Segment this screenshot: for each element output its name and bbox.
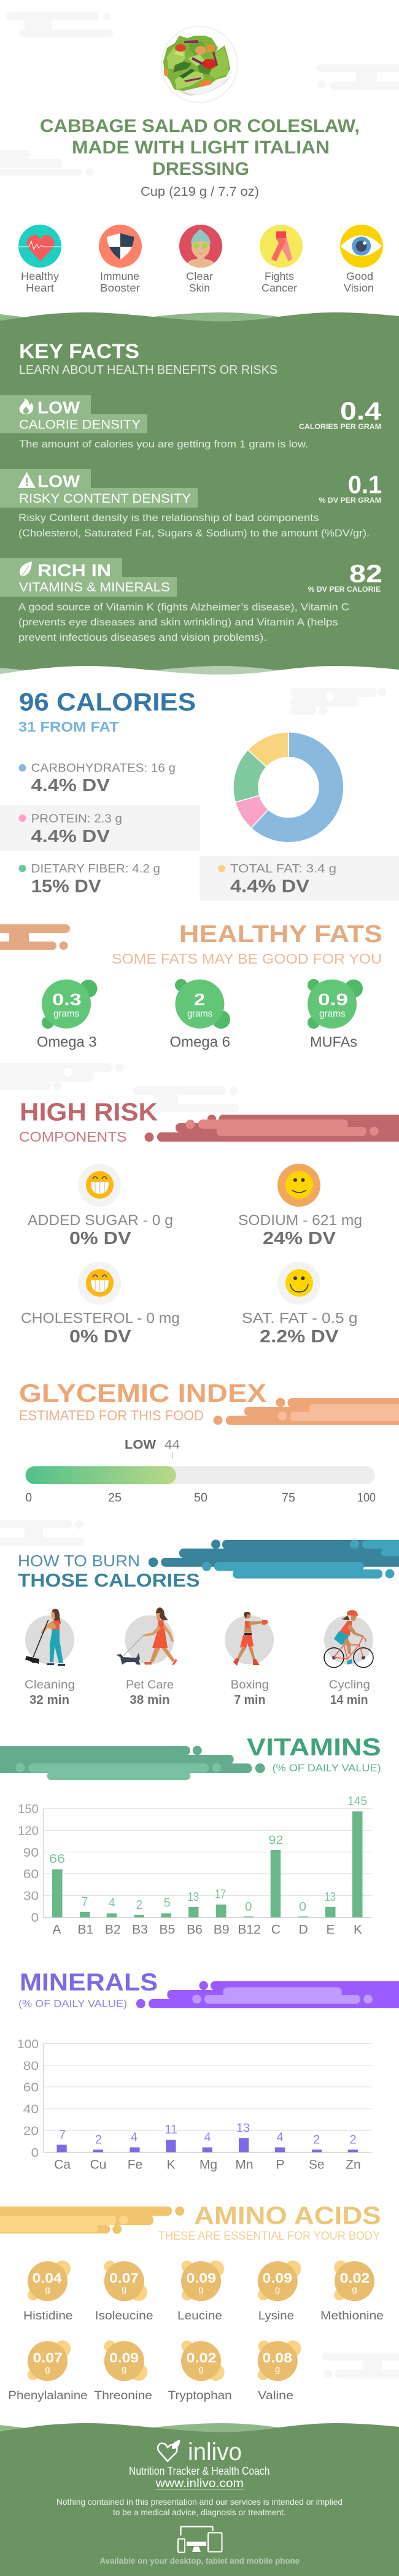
bar chart: minerals: Mn (235, 2157, 254, 2172)
tagline: Nutrition Tracker & Health Coach (129, 2465, 270, 2477)
benefit labels: Cancer (261, 282, 297, 294)
bar chart: vitamins: 30 (23, 1890, 39, 1903)
bar chart: minerals: P (276, 2157, 285, 2172)
risk: cholesterol: CHOLESTEROL - 0 mg (21, 1310, 180, 1327)
panel: calories (0, 688, 399, 901)
bar chart: vitamins: C (271, 1923, 281, 1937)
amino: threonine: g (122, 2364, 126, 2375)
decorative header shape (149, 1539, 399, 1579)
amino: tryptophan (168, 2340, 232, 2402)
activity: cycling (324, 1610, 373, 1707)
website link: www.inlivo.com (155, 2477, 244, 2490)
legend: dietary fiber: DIETARY FIBER: 4.2 g (31, 863, 160, 876)
amino: histidine: Histidine (23, 2310, 73, 2323)
fat: mufas (308, 979, 363, 1051)
bar chart: vitamins: 0 (31, 1911, 39, 1925)
bar chart: vitamins: 7 (82, 1895, 88, 1909)
bar chart: minerals: 0 (31, 2146, 39, 2160)
bar chart: vitamins: 60 (23, 1868, 39, 1881)
bar chart: vitamins: 90 (23, 1846, 39, 1860)
fat: omega 6: Omega 6 (169, 1034, 230, 1051)
fat: omega 3 (37, 980, 97, 1051)
bar chart: vitamins: 0 (245, 1900, 252, 1914)
activity: cleaning (25, 1609, 75, 1707)
bar chart: vitamins: 17 (215, 1888, 226, 1901)
fat: omega 6: grams (187, 1009, 212, 1019)
amino: phenylalanine: Phenylalanine (8, 2389, 88, 2402)
activity time: 32 min (29, 1693, 69, 1707)
activity label: Cycling (329, 1679, 370, 1692)
benefit labels: Skin (189, 282, 210, 294)
bar chart: vitamins: B9 (214, 1923, 230, 1937)
activity: pet care (116, 1607, 177, 1707)
amino: histidine: 0.04 (33, 2270, 63, 2286)
risk: sodium (238, 1164, 362, 1248)
title: DRESSING (152, 159, 249, 179)
heading: amino acids: AMINO ACIDS (194, 2202, 381, 2230)
heading line 2: THOSE CALORIES (18, 1569, 200, 1591)
heading line 1: HOW TO BURN (18, 1552, 140, 1570)
legend: total fat: TOTAL FAT: 3.4 g (230, 863, 336, 876)
fact: vitamins and minerals: A good source of Vitamin K (fights Alzheimer’s disease), Vitamin C (18, 601, 349, 613)
benefit labels: Heart (26, 282, 54, 294)
fact: vitamins and minerals: 82 (349, 559, 382, 587)
fact: calorie density: The amount of calories you are getting from 1 gram is low. (19, 439, 308, 450)
amino: lysine: g (275, 2284, 280, 2295)
panel: how to burn those calories (18, 1539, 399, 1707)
bar chart: vitamins: 92 (268, 1834, 283, 1847)
bar chart: vitamins: B2 (105, 1923, 121, 1937)
bar chart: minerals: 2 (349, 2133, 357, 2147)
panel: vitamins (0, 1734, 381, 1937)
subheading: from fat: 31 FROM FAT (18, 719, 119, 735)
legend: dietary fiber (18, 863, 160, 896)
bar chart: vitamins: A (52, 1923, 61, 1937)
bar chart: vitamins: 120 (18, 1824, 39, 1838)
activity time: 14 min (330, 1693, 368, 1707)
fact: calorie density: LOW (37, 398, 80, 417)
panel: glycemic index (19, 1379, 399, 1505)
fact: vitamins and minerals: VITAMINS & MINERALS (19, 581, 170, 595)
bar chart: minerals: 20 (23, 2125, 39, 2138)
amino: isoleucine (95, 2261, 153, 2323)
bar chart: minerals: K (167, 2157, 176, 2172)
bar chart: vitamins: E (326, 1923, 335, 1937)
icon: clear skin (179, 225, 222, 268)
bar chart: vitamins: 145 (347, 1795, 367, 1808)
decorative header shape (0, 2207, 184, 2234)
amino: phenylalanine: g (45, 2364, 50, 2375)
legend: protein (18, 813, 122, 846)
legend: carbohydrates: CARBOHYDRATES: 16 g (31, 762, 176, 775)
fat: mufas: 0.9 (318, 991, 348, 1009)
amino: leucine: g (198, 2284, 204, 2295)
bar chart: vitamins: 0 (299, 1900, 306, 1914)
fact: risky content density: RISKY CONTENT DENSITY (19, 492, 191, 506)
panel: minerals (17, 1969, 399, 2172)
amino: valine: g (275, 2364, 280, 2375)
disclaimer (56, 2497, 343, 2517)
bar chart: minerals: 100 (17, 2038, 39, 2051)
amino: methionine: g (352, 2284, 357, 2295)
legend: total fat: 4.4% DV (230, 876, 310, 896)
activity label: Boxing (231, 1679, 269, 1692)
legend: total fat (218, 863, 336, 896)
gauge axis: 25 (108, 1491, 122, 1505)
heading: high risk: HIGH RISK (20, 1098, 158, 1126)
amino: threonine (94, 2340, 152, 2402)
amino: tryptophan: g (198, 2364, 204, 2375)
heading: glycemic index: GLYCEMIC INDEX (19, 1379, 266, 1407)
benefit labels: Booster (100, 282, 140, 294)
disclaimer: Nothing contained in this presentation and our services is intended or implied (56, 2497, 343, 2507)
fat: omega 6: 2 (194, 991, 205, 1009)
fact: calorie density: CALORIES PER GRAM (299, 422, 381, 431)
bar chart: vitamins: B6 (187, 1923, 203, 1937)
bar chart: vitamins: B12 (238, 1923, 261, 1937)
icon: healthy heart (18, 225, 61, 268)
fact: vitamins and minerals (0, 558, 382, 643)
donut chart (233, 732, 344, 843)
bar chart: vitamins: 2 (136, 1898, 142, 1912)
serving size: Cup (219 g / 7.7 oz) (141, 185, 259, 199)
bar chart: minerals: Mg (200, 2157, 217, 2172)
amino: histidine (23, 2261, 73, 2323)
risk: cholesterol (21, 1262, 180, 1347)
logo: inlivo (158, 2439, 242, 2466)
gauge: value label: 44 (165, 1437, 180, 1452)
activity: boxing (225, 1612, 274, 1707)
icon: devices (178, 2526, 222, 2552)
fat: omega 3: Omega 3 (37, 1034, 97, 1051)
bar chart: minerals: Zn (346, 2157, 361, 2172)
amino: phenylalanine (8, 2340, 88, 2402)
bar chart: vitamins: 4 (109, 1897, 115, 1910)
subheading: (% OF DAILY VALUE) (18, 1998, 127, 2009)
amino: valine: 0.08 (263, 2350, 292, 2365)
amino: isoleucine: Isoleucine (95, 2310, 153, 2323)
bar chart: vitamins: 150 (18, 1803, 39, 1816)
panel: key facts (0, 312, 399, 675)
risk: cholesterol: 0% DV (69, 1327, 131, 1347)
bar chart: minerals: 2 (313, 2133, 320, 2147)
title: CABBAGE SALAD OR COLESLAW, (40, 116, 360, 136)
bar chart: minerals: 80 (23, 2059, 39, 2073)
fact: risky content density: Risky Content density is the relationship of bad components (18, 512, 319, 524)
heading: minerals: MINERALS (20, 1969, 158, 1996)
risk: sodium: SODIUM - 621 mg (238, 1212, 362, 1229)
panel: healthy fats (0, 921, 382, 1051)
fat: mufas: grams (319, 1009, 346, 1019)
panel: footer (0, 2423, 399, 2576)
highlight rows (0, 805, 399, 901)
amino: phenylalanine: 0.07 (33, 2350, 63, 2365)
disclaimer: to be a medical advice, diagnosis or treatment. (113, 2507, 286, 2517)
subheading: ESTIMATED FOR THIS FOOD (19, 1407, 204, 1423)
benefit labels: Vision (344, 282, 374, 294)
fat: omega 6 (169, 979, 230, 1051)
benefit labels: Fights (265, 270, 294, 282)
heading: healthy fats: HEALTHY FATS (179, 921, 382, 948)
gauge: value label: LOW (125, 1437, 157, 1452)
gauge: value label (125, 1437, 180, 1459)
icon: good vision eye (340, 225, 383, 268)
bar chart: minerals: Se (309, 2157, 325, 2172)
panel: amino acids (0, 2202, 384, 2402)
heading: key facts: KEY FACTS (19, 340, 139, 363)
availability note: Available on your desktop, tablet and mobile phone (99, 2556, 300, 2566)
bar chart: minerals: Fe (128, 2157, 142, 2172)
decorative header shape (214, 1398, 399, 1425)
activity time: 38 min (130, 1693, 169, 1707)
amino: valine (258, 2340, 301, 2402)
icon: immune shield (99, 225, 142, 268)
legend: dietary fiber: 15% DV (31, 876, 101, 896)
fat: omega 3: 0.3 (52, 991, 82, 1009)
risk: saturated fat: 2.2% DV (260, 1327, 338, 1347)
amino: leucine: 0.09 (187, 2270, 216, 2286)
bar chart: minerals (17, 2038, 371, 2172)
amino: methionine: Methionine (320, 2310, 384, 2323)
gauge axis: 100 (357, 1491, 376, 1505)
risk: sodium: 24% DV (263, 1229, 336, 1248)
bar chart: vitamins: 13 (325, 1890, 336, 1904)
amino: tryptophan: Tryptophan (168, 2389, 232, 2402)
amino: histidine: g (45, 2284, 50, 2295)
risk: saturated fat: SAT. FAT - 0.5 g (242, 1310, 357, 1327)
amino: isoleucine: g (122, 2284, 126, 2295)
amino: valine: Valine (258, 2389, 293, 2402)
benefit labels (21, 270, 374, 294)
risk: added sugar: ADDED SUGAR - 0 g (28, 1212, 173, 1229)
benefit labels: Clear (186, 270, 213, 282)
subheading: LEARN ABOUT HEALTH BENEFITS OR RISKS (19, 363, 277, 377)
amino: methionine (320, 2261, 384, 2323)
activity time: 7 min (234, 1693, 265, 1707)
food photo: salad bowl (161, 26, 238, 102)
bar chart: vitamins: K (354, 1923, 362, 1937)
activity label: Cleaning (25, 1679, 75, 1692)
fact: risky content density: % DV PER GRAM (319, 496, 381, 505)
health benefits icons (18, 225, 383, 294)
bar chart: minerals: 2 (95, 2133, 102, 2147)
subheading: (% OF DAILY VALUE) (273, 1762, 381, 1774)
bar chart: minerals: 4 (204, 2130, 211, 2144)
bar chart: minerals: Ca (54, 2157, 71, 2172)
fact: vitamins and minerals: (prevents eye diseases and skin wrinkling) and Vitamin A (helps (18, 617, 338, 628)
fat: mufas: MUFAs (310, 1034, 357, 1051)
heading: vitamins: VITAMINS (247, 1734, 381, 1761)
bar chart: minerals: Cu (90, 2157, 106, 2172)
risk: added sugar: 0% DV (69, 1229, 131, 1248)
decorative header shape (145, 1115, 399, 1142)
fact: calorie density: 0.4 (340, 397, 381, 425)
fact: risky content density: 0.1 (348, 471, 382, 499)
legend: carbohydrates: 4.4% DV (31, 776, 110, 795)
bar chart: minerals: 7 (59, 2128, 66, 2141)
gauge axis (26, 1491, 376, 1505)
logo: inlivo: inlivo (188, 2439, 242, 2466)
amino: lysine: Lysine (258, 2310, 294, 2323)
fact: calorie density: CALORIE DENSITY (19, 417, 141, 432)
legend: protein: PROTEIN: 2.3 g (31, 813, 122, 826)
bar chart: vitamins (18, 1795, 371, 1937)
amino: lysine (258, 2261, 301, 2323)
fact: vitamins and minerals: % DV PER CALORIE (308, 585, 381, 594)
bar chart: minerals: 40 (23, 2103, 39, 2116)
fact: risky content density (0, 469, 382, 539)
benefit labels: Immune (100, 270, 139, 282)
title (40, 116, 360, 179)
benefit labels: Healthy (21, 270, 59, 282)
gauge axis: 50 (194, 1491, 207, 1505)
risk: saturated fat (242, 1262, 357, 1347)
legend: carbohydrates (18, 762, 176, 795)
subheading: THESE ARE ESSENTIAL FOR YOUR BODY (158, 2230, 380, 2243)
title: MADE WITH LIGHT ITALIAN (72, 137, 330, 158)
amino: threonine: Threonine (94, 2389, 152, 2402)
bar chart: minerals: 13 (236, 2121, 250, 2135)
bar chart: vitamins: B3 (132, 1923, 148, 1937)
bar chart: minerals: 4 (276, 2130, 284, 2144)
gauge axis: 75 (282, 1491, 295, 1505)
bar chart: vitamins: 5 (164, 1897, 171, 1910)
amino: lysine: 0.09 (263, 2270, 292, 2286)
bar chart: vitamins: 66 (49, 1852, 65, 1866)
amino: tryptophan: 0.02 (187, 2350, 216, 2365)
decorative header shape (0, 1746, 265, 1780)
amino: leucine: Leucine (177, 2310, 222, 2323)
fact: calorie density (0, 395, 381, 450)
decorative header shape (0, 924, 70, 950)
benefit labels: Good (346, 270, 373, 282)
bar chart: minerals: 4 (131, 2130, 138, 2144)
bar chart: minerals: 60 (23, 2081, 39, 2094)
heading: 96 calories: 96 CALORIES (19, 688, 196, 716)
subheading: COMPONENTS (19, 1129, 126, 1145)
amino: threonine: 0.09 (109, 2350, 139, 2365)
bar chart: vitamins: 13 (188, 1890, 199, 1904)
decorative header shape (136, 1981, 399, 2008)
amino: methionine: 0.02 (340, 2270, 370, 2286)
fact: risky content density: LOW (37, 471, 80, 491)
activity label: Pet Care (126, 1679, 174, 1692)
amino: isoleucine: 0.07 (109, 2270, 139, 2286)
panel: high risk components (19, 1098, 399, 1347)
icon: fights cancer ribbon (260, 225, 303, 268)
fact: vitamins and minerals: prevent infectious diseases and vision problems). (18, 632, 266, 643)
subheading: SOME FATS MAY BE GOOD FOR YOU (112, 951, 382, 967)
fact: risky content density: (Cholesterol, Saturated Fat, Sugars & Sodium) to the amount (%DV/gr). (18, 528, 370, 539)
bar chart: minerals: 11 (165, 2123, 177, 2137)
gauge bar (26, 1466, 375, 1484)
fat: omega 3: grams (53, 1009, 79, 1019)
fact: vitamins and minerals: RICH IN (37, 561, 111, 579)
legend: protein: 4.4% DV (31, 827, 110, 846)
risk: added sugar (28, 1164, 173, 1248)
bar chart: vitamins: D (299, 1923, 308, 1937)
gauge axis: 0 (26, 1491, 32, 1505)
bar chart: vitamins: B1 (77, 1923, 93, 1937)
amino: leucine (177, 2261, 224, 2323)
bar chart: vitamins: B5 (160, 1923, 175, 1937)
